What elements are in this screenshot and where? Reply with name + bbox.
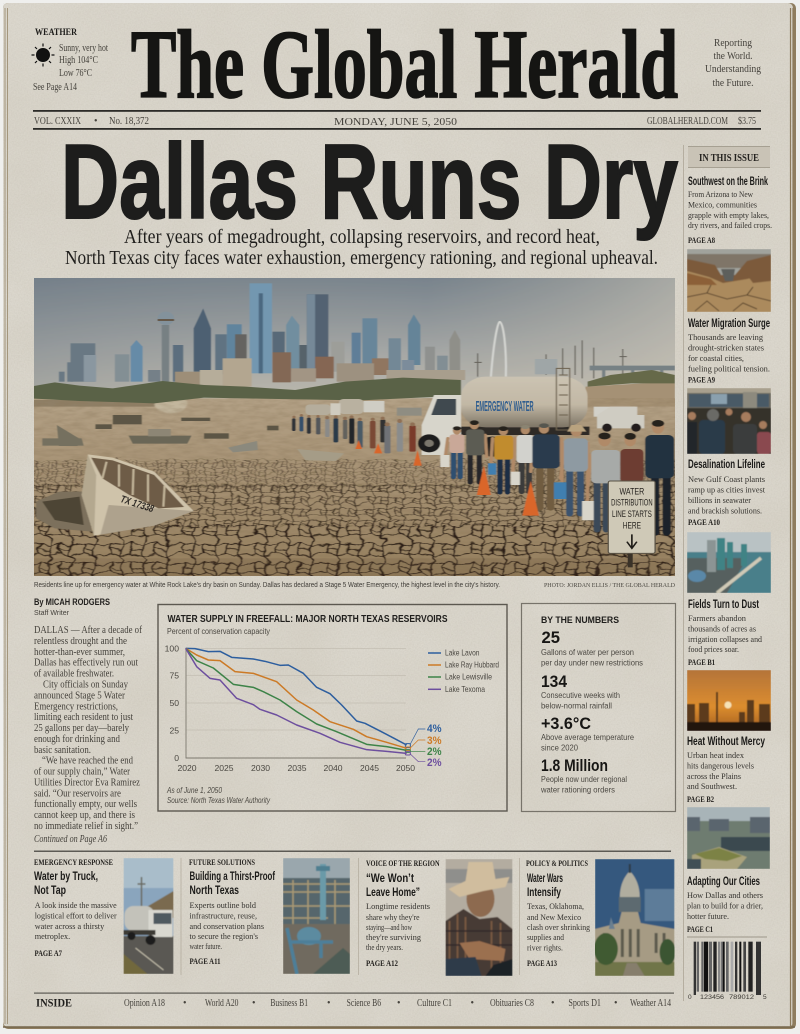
teaser: policy and politics: river rights.	[527, 942, 563, 952]
story: Southwest on the Brink: From Arizona to New	[688, 189, 754, 199]
inside index bar: Opinion A18	[124, 998, 165, 1009]
teaser: emergency response: A look inside the massive	[35, 900, 117, 910]
barcode: 789012	[729, 994, 754, 1001]
teaser: policy and politics	[526, 859, 591, 968]
story: Fields Turn to Dust	[688, 597, 763, 667]
distant trucks and crowd	[292, 399, 422, 453]
teaser: future solutions: to secure the region's	[190, 931, 259, 941]
article text: basic sanitation.	[34, 745, 91, 756]
photo: green roof city	[687, 807, 770, 869]
continued note: Continued on Page A6	[34, 834, 107, 845]
story: Heat Without Mercy: Heat Without Mercy	[687, 734, 765, 748]
story: Adapting Our Cities: How Dallas and others	[687, 890, 764, 900]
story: Adapting Our Cities: Adapting Our Cities	[687, 874, 760, 888]
chart heading: WATER SUPPLY IN FREEFALL: MAJOR NORTH TEXAS RESERVOIRS	[168, 614, 448, 625]
teaser: policy and politics: and New Mexico	[527, 912, 581, 922]
stat: 25 gallons	[541, 628, 643, 668]
foreground queue of people	[355, 420, 674, 532]
weather box: Low 76°C	[59, 68, 92, 79]
teaser: emergency response: PAGE A7	[34, 949, 62, 958]
stat: temperature: +3.6°C	[541, 714, 591, 733]
teaser: voice of the region	[366, 859, 440, 968]
series: Lake Lavon	[186, 648, 407, 745]
inside index bar: •	[252, 998, 256, 1009]
story: Fields Turn to Dust: thousands of acres as	[688, 624, 757, 634]
article text: cannot keep up, and there is	[34, 810, 135, 821]
photo credit: PHOTO: JORDAN ELLIS / THE GLOBAL HERALD	[544, 582, 675, 589]
teaser: emergency response: EMERGENCY RESPONSE	[34, 858, 113, 867]
story: Water Migration Surge: Thousands are leaving	[688, 332, 764, 342]
weather box: Sunny, very hot	[59, 43, 108, 54]
teaser: future solutions: infrastructure, reuse,	[190, 910, 257, 920]
story: Desalination Lifeline: New Gulf Coast plants	[688, 474, 766, 484]
panel: in this issue sidebar	[684, 145, 772, 1001]
end value labels: 4%	[427, 723, 442, 735]
photo: airport crowd	[687, 388, 771, 454]
tree line	[30, 378, 461, 403]
chart legend: Lake Lewisville	[445, 672, 492, 682]
barcode: 123456	[700, 994, 724, 1001]
teaser: future solutions: PAGE A11	[190, 957, 220, 966]
teaser: voice of the region: VOICE OF THE REGION	[366, 859, 440, 868]
motto: the World.	[714, 51, 752, 62]
weather box: See Page A14	[33, 82, 77, 93]
story: Heat Without Mercy: PAGE B2	[687, 795, 714, 804]
teaser: future solutions: Building a Thirst-Proof	[190, 869, 276, 883]
end value labels: 3%	[427, 735, 442, 747]
motto: Understanding	[705, 64, 761, 75]
article text: relentless drought and the	[34, 636, 128, 647]
deck text	[65, 227, 658, 269]
teaser: emergency response: water across a thirsty	[35, 921, 105, 931]
inside index bar: •	[551, 998, 555, 1009]
line chart: 100	[165, 644, 179, 654]
barcode: 0	[688, 994, 692, 1001]
chart source note: As of June 1, 2050	[166, 785, 222, 795]
teaser: policy and politics: Texas, Oklahoma,	[527, 901, 584, 911]
article text: Dallas has effectively run out	[34, 658, 138, 668]
line chart: 25	[169, 726, 179, 736]
main article column	[34, 597, 143, 845]
inside index bar: •	[397, 998, 401, 1009]
sign: water distribution line: WATER	[619, 486, 645, 497]
end value labels: 2%	[427, 757, 442, 769]
article text: 25 gallons per day—barely	[34, 723, 129, 734]
inside index bar: Sports D1	[568, 998, 601, 1009]
story: Adapting Our Cities: plan to build for a drier,	[687, 900, 763, 910]
article text: Emergency restrictions,	[34, 702, 118, 712]
hero photo: dry lake, skyline and water queue: EMERGENCY WATER	[476, 398, 534, 415]
inside index bar: •	[183, 998, 187, 1009]
sidebar heading: IN THIS ISSUE	[699, 153, 759, 164]
sign: water distribution line: LINE STARTS	[612, 509, 652, 520]
inside index bar: •	[470, 998, 474, 1009]
end value labels: 2%	[427, 746, 442, 758]
weather box	[32, 27, 108, 93]
deck text: North Texas city faces water exhaustion, emergency rationing, and regional upheaval.	[65, 248, 658, 269]
photo: canyon	[687, 249, 771, 312]
chart legend	[428, 648, 499, 694]
photo caption: Residents line up for emergency water at White Rock Lake's dry basin on Sunday. Dallas has declared a Stage 5 Water Emergency, the highest level in the city's history.	[34, 582, 500, 589]
teaser: future solutions: and conservation plans	[190, 921, 265, 931]
water tanker truck	[418, 368, 644, 457]
teaser: emergency response: Not Tap	[34, 883, 66, 897]
dateline bar: MONDAY, JUNE 5, 2050	[334, 117, 457, 128]
stat: people: 1.8 Million	[541, 756, 608, 775]
story: Fields Turn to Dust: Farmers abandon	[688, 613, 747, 623]
series: Lake Ray Hubbard	[186, 648, 407, 748]
line chart: 2045	[360, 763, 379, 773]
chart legend: Lake Texoma	[445, 684, 485, 694]
inside index bar: •	[614, 998, 618, 1009]
inside index bar: •	[327, 998, 331, 1009]
article text: City officials on Sunday	[43, 680, 128, 690]
story: Southwest on the Brink: PAGE A8	[688, 236, 715, 245]
weather box: WEATHER	[35, 27, 77, 37]
line chart: 2040	[323, 763, 343, 773]
teaser: voice of the region: share why they're	[366, 912, 420, 922]
sidebar heading	[688, 146, 770, 168]
hero photo: dry lake, skyline and water queue	[34, 278, 675, 576]
story: Fields Turn to Dust: Fields Turn to Dust	[688, 597, 759, 611]
inside index bar: Weather A14	[630, 998, 671, 1009]
article text: “We have reached the end	[42, 756, 133, 766]
line chart: 2035	[287, 763, 307, 773]
article text: announced Stage 5 Water	[34, 690, 126, 702]
line chart: 0	[174, 753, 179, 763]
teaser: voice of the region: the dry years.	[366, 942, 403, 952]
story: Water Migration Surge: for coastal cities,	[688, 353, 744, 363]
boat registration: TX 17338	[118, 494, 156, 515]
story: Heat Without Mercy	[687, 734, 765, 804]
story: Adapting Our Cities: PAGE C1	[687, 925, 713, 934]
line chart	[165, 644, 442, 773]
stat: people: water rationing orders	[540, 784, 615, 794]
line chart: 2025	[214, 763, 234, 773]
barcode: 5	[763, 994, 767, 1001]
photo: state capitol	[595, 859, 674, 976]
teaser: voice of the region: PAGE A12	[366, 959, 398, 968]
story: Water Migration Surge: drought-stricken states	[688, 342, 765, 352]
stranded boats	[36, 415, 344, 536]
teaser: voice of the region: staying—and how	[366, 922, 413, 932]
photo: treatment plant	[283, 858, 350, 974]
byline: Staff Writer	[34, 608, 69, 617]
stat: people: People now under regional	[541, 774, 627, 784]
story: Desalination Lifeline: billions in seawater	[688, 495, 751, 505]
sign: water distribution line: DISTRIBUTION	[611, 498, 653, 508]
motto: the Future.	[712, 78, 754, 89]
sign: water distribution line	[608, 481, 655, 567]
sign: water distribution line: HERE	[623, 520, 641, 531]
teaser: voice of the region: Leave Home”	[366, 885, 420, 899]
photo: desalination plant	[687, 532, 771, 593]
stat: people	[540, 756, 627, 794]
story: Desalination Lifeline: ramp up as cities invest	[688, 484, 766, 494]
dateline bar: GLOBALHERALD.COM	[647, 116, 728, 127]
story: Desalination Lifeline: and brackish solutions.	[688, 506, 762, 516]
reunion tower	[158, 312, 174, 382]
chart subtitle: Percent of conservation capacity	[167, 626, 271, 636]
series: Lake Texoma	[186, 648, 407, 753]
article text: limiting each resident to just	[34, 712, 133, 723]
panel heading: BY THE NUMBERS	[541, 615, 619, 626]
story: Adapting Our Cities	[687, 874, 764, 934]
teaser: voice of the region: Longtime residents	[366, 901, 431, 911]
cracked lake bed	[17, 382, 706, 585]
line chart: 50	[169, 698, 179, 708]
panel: reservoir chart	[158, 604, 507, 811]
photo: sunset skyline	[687, 670, 771, 731]
inside index bar: Obituaries C8	[490, 998, 534, 1009]
teaser: emergency response	[34, 858, 117, 958]
weather box: High 104°C	[59, 55, 98, 66]
article text: no immediate relief in sight.”	[34, 821, 138, 832]
article text: DALLAS — After a decade of	[34, 625, 143, 636]
line chart: 2050	[396, 763, 415, 773]
teaser: future solutions: FUTURE SOLUTIONS	[189, 858, 255, 867]
article text: of our supply chain,” Water	[34, 766, 131, 778]
story: Heat Without Mercy: Urban heat index	[687, 750, 745, 760]
article text: enough for drinking and	[34, 734, 120, 745]
chart legend: Lake Ray Hubbard	[445, 660, 499, 670]
story: Fields Turn to Dust: irrigation collapses and	[688, 634, 763, 644]
story: Southwest on the Brink: dry rivers, and failed crops.	[688, 220, 772, 230]
panel: by the numbers	[522, 604, 676, 812]
deck text: After years of megadrought, collapsing reservoirs, and record heat,	[124, 227, 600, 248]
inside index bar: INSIDE	[36, 998, 72, 1010]
dateline bar: No. 18,372	[109, 116, 149, 127]
teaser: policy and politics: clash over shrinking	[527, 922, 591, 932]
teaser: future solutions	[189, 858, 276, 966]
stat: 25 gallons: Gallons of water per person	[541, 647, 634, 657]
stat: 134 weeks: 134	[541, 672, 567, 691]
story: Desalination Lifeline	[688, 457, 766, 527]
article text: Utilities Director Eva Ramirez	[34, 778, 140, 788]
article text: functionally empty, our wells	[34, 799, 137, 810]
story: Heat Without Mercy: across the Plains	[687, 771, 742, 781]
stat: 134 weeks: Consecutive weeks with	[541, 690, 620, 700]
dateline bar	[33, 110, 761, 130]
story: Adapting Our Cities: hotter future.	[687, 911, 729, 921]
dateline bar: $3.75	[738, 116, 756, 127]
inside index bar: Science B6	[347, 998, 381, 1009]
barcode	[688, 942, 767, 1001]
story: Southwest on the Brink: Mexico, communities	[688, 200, 758, 210]
series: Lake Lewisville	[186, 648, 407, 750]
dateline bar: •	[94, 116, 98, 127]
teaser: emergency response: Water by Truck,	[34, 869, 98, 883]
story: Desalination Lifeline: PAGE A10	[688, 518, 720, 527]
line chart: 2020	[177, 763, 197, 773]
teaser: policy and politics: POLICY & POLITICS	[526, 859, 588, 868]
chart legend: Lake Lavon	[445, 648, 480, 658]
photo: tanker on road	[124, 858, 174, 974]
teaser: policy and politics: supplies and	[527, 932, 565, 942]
inside index bar	[34, 992, 674, 1010]
stat: temperature: since 2020	[541, 742, 578, 752]
byline	[34, 597, 110, 617]
photo: farmer in cowboy hat	[446, 859, 512, 976]
icon: sun	[32, 44, 54, 66]
story: Water Migration Surge: fueling political tension.	[688, 364, 770, 374]
teaser: voice of the region: they're surviving	[366, 932, 422, 942]
arch and pylons	[491, 322, 506, 377]
skyline	[30, 275, 693, 388]
inside index bar: Business B1	[270, 998, 308, 1009]
teaser: emergency response: logistical effort to deliver	[35, 910, 117, 920]
teaser: policy and politics: Water Wars	[527, 871, 563, 885]
stat: 25 gallons: 25	[542, 628, 560, 647]
dateline bar: VOL. CXXIX	[34, 116, 82, 127]
byline: By MICAH RODGERS	[34, 597, 110, 607]
motto	[705, 38, 761, 89]
motto: Reporting	[714, 38, 752, 49]
story: Southwest on the Brink: grapple with empty lakes,	[688, 210, 769, 220]
line chart: 75	[169, 670, 179, 680]
article text	[34, 625, 143, 832]
chart source note	[166, 785, 271, 805]
story: Water Migration Surge: PAGE A9	[688, 376, 715, 384]
article text: of available freshwater.	[34, 668, 114, 680]
stat: 25 gallons: per day under new restrictions	[541, 658, 643, 668]
stat: temperature: Above average temperature	[541, 732, 634, 742]
bottom rule	[34, 850, 671, 852]
teaser: policy and politics: PAGE A13	[527, 959, 557, 968]
story: Heat Without Mercy: hits dangerous levels	[687, 760, 755, 770]
end value labels	[427, 723, 442, 769]
article text: hotter-than-ever summer,	[34, 647, 125, 658]
chart source note: Source: North Texas Water Authority	[167, 795, 271, 805]
line chart: 2030	[251, 763, 270, 773]
teaser: future solutions: water future.	[190, 941, 222, 951]
stat: 134 weeks	[541, 672, 620, 710]
teaser: emergency response: metroplex.	[35, 931, 70, 941]
stat: temperature	[541, 714, 634, 752]
story: Fields Turn to Dust: food prices soar.	[688, 644, 739, 654]
story: Fields Turn to Dust: PAGE B1	[688, 658, 715, 667]
story: Water Migration Surge	[688, 316, 770, 384]
teaser: voice of the region: “We Won’t	[366, 871, 414, 885]
teaser: future solutions: North Texas	[190, 883, 239, 897]
inside index bar: World A20	[205, 998, 238, 1009]
story: Southwest on the Brink	[688, 174, 772, 245]
inside index bar: Culture C1	[417, 998, 452, 1009]
teaser: future solutions: Experts outline bold	[190, 900, 257, 910]
story: Heat Without Mercy: and Southwest.	[687, 781, 737, 791]
teaser: policy and politics: Intensify	[527, 885, 561, 899]
stat: 134 weeks: below-normal rainfall	[541, 700, 612, 710]
article text: said. “Our reservoirs are	[34, 788, 121, 800]
